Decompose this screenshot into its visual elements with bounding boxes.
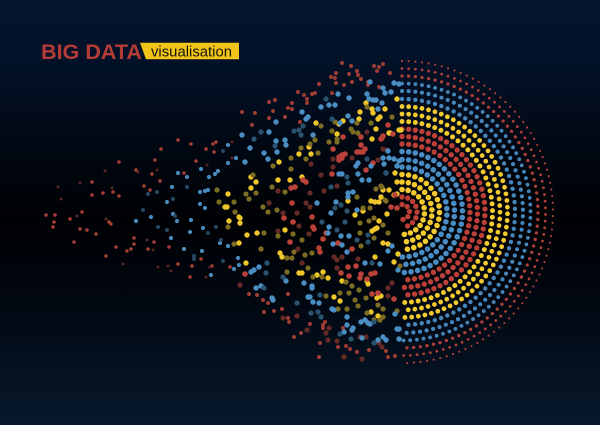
particles: dim blue (254, 99, 386, 343)
chart: concentric dotted half-rings (402, 61, 553, 363)
particles: bright yellow (225, 99, 401, 316)
heading: BIG DATA: BIG DATA (41, 41, 142, 64)
scattered particles (46, 63, 401, 359)
particles: far-left dim red (58, 142, 232, 277)
ring band: outer red (402, 61, 553, 363)
ring band: inner red (402, 197, 417, 227)
subtitle banner: visualisation (151, 44, 232, 60)
particles: central blue (242, 82, 399, 340)
ring band: outer yellow (402, 106, 508, 318)
ring band: inner yellow (402, 174, 440, 250)
particles: far-left red (46, 140, 230, 277)
particles: dim yellow (217, 107, 400, 320)
ring band: middle red (402, 129, 485, 295)
particles: dim red (240, 132, 392, 359)
particles: upper and lower small red (242, 63, 395, 357)
title (41, 41, 239, 64)
ring band: inner blue (402, 152, 462, 272)
particles: central red (245, 125, 397, 299)
particles: far-left dim blue (143, 151, 223, 261)
ring band: outer blue (402, 84, 530, 340)
particles: far-left blue (136, 145, 239, 275)
